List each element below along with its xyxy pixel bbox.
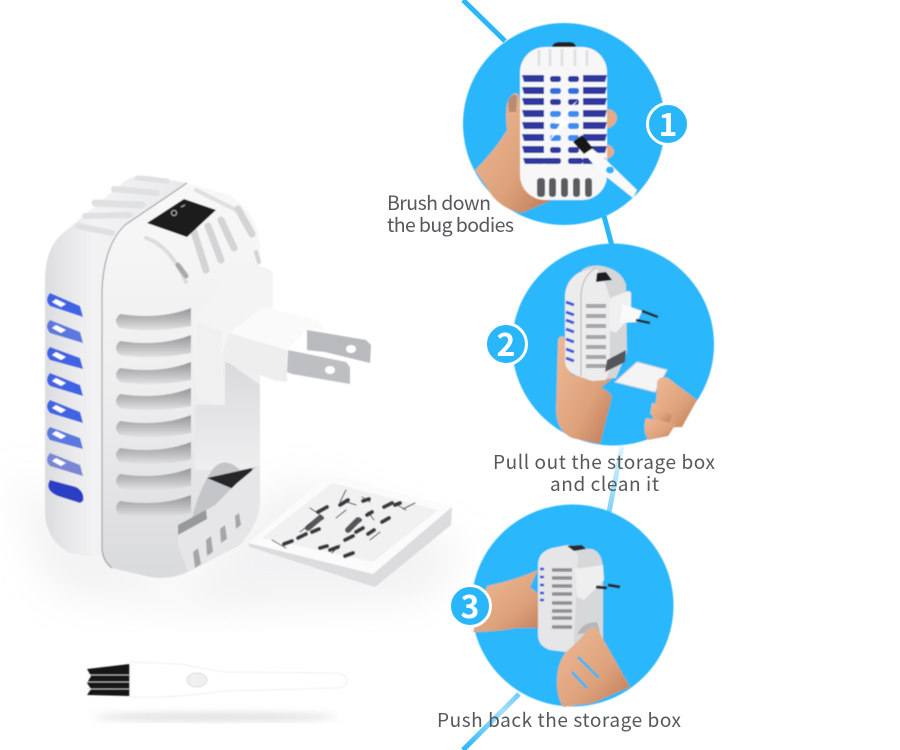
badge 2 [486, 320, 526, 366]
connector line: step 2 to 3 [609, 446, 622, 512]
brush bristles [87, 664, 130, 696]
right shell [102, 183, 260, 578]
step 2 panel [512, 244, 714, 446]
brush hole [187, 673, 207, 687]
blue UV side slots [47, 293, 83, 503]
floor shadow [10, 470, 470, 610]
device rear [566, 547, 603, 653]
plug pins [596, 585, 620, 588]
badge 1: 1 [659, 100, 677, 146]
plug base side [196, 322, 225, 405]
bottom vents [537, 178, 592, 197]
finger gaps [572, 657, 599, 688]
left hand [473, 570, 549, 632]
brush accessory [87, 662, 347, 720]
device body [520, 47, 607, 200]
blue side slots [566, 302, 574, 361]
device front [565, 268, 610, 381]
bottom hand [557, 628, 630, 707]
caption 3: Push back the storage box [437, 706, 682, 733]
top vents [78, 178, 240, 233]
device front [538, 545, 578, 653]
plug body front [220, 333, 287, 382]
front vent slots [116, 308, 191, 517]
blue disc [463, 23, 665, 225]
connector line: top [463, 0, 505, 41]
switch [567, 545, 586, 551]
tray opening [178, 462, 260, 572]
storage tray [248, 475, 452, 587]
step 1 panel [463, 23, 665, 225]
switch [552, 42, 576, 47]
badge 3 [450, 582, 490, 628]
badge 1 [648, 100, 688, 146]
tray hand [644, 377, 697, 440]
brush shadow [93, 714, 337, 720]
tray opening [577, 622, 600, 635]
small tray [615, 362, 667, 392]
hand [475, 93, 552, 213]
side vents near switch [146, 209, 259, 282]
holding hand [556, 336, 613, 444]
housing seam [102, 183, 187, 568]
badge 2: 2 [497, 320, 515, 366]
blue side slots [540, 569, 544, 600]
badge 3: 3 [461, 582, 479, 628]
lightning mark [548, 100, 578, 142]
cleaning brush [573, 135, 637, 198]
power switch [147, 199, 216, 237]
tray opening [605, 350, 626, 372]
slots [552, 570, 572, 627]
caption 1 [387, 187, 514, 238]
dead bugs [272, 490, 415, 556]
caption 2: and clean it [550, 470, 659, 497]
blue disc [472, 504, 674, 706]
plug pins [636, 311, 658, 323]
caption 1: the bug bodies [387, 209, 514, 238]
thumb nail [508, 95, 517, 112]
caption 1: Brush down [387, 187, 491, 216]
fingers right [606, 109, 617, 159]
EU plug body [620, 304, 642, 323]
connector line: bottom [463, 694, 519, 750]
prong rear [307, 330, 371, 363]
EU plug base [609, 291, 631, 333]
caption 2: Pull out the storage box [493, 448, 716, 475]
glowing slots [522, 75, 607, 164]
switch [596, 272, 612, 282]
blue disc [512, 244, 714, 446]
prong front [287, 350, 350, 384]
brush handle [130, 662, 347, 697]
left shell [45, 176, 187, 558]
EU plug [575, 565, 604, 600]
slots [586, 306, 606, 366]
step 3 panel [472, 504, 674, 707]
plug body top [229, 307, 325, 350]
rear lower body [195, 360, 260, 470]
device rear [578, 266, 627, 380]
top ribs [539, 49, 587, 66]
seam [581, 268, 596, 376]
illustration: bug zapper with removed tray [10, 176, 470, 610]
bristle gaps [87, 675, 130, 689]
caption 2 [493, 448, 716, 497]
plug base [194, 267, 273, 405]
connector line: step 1 to 2 [604, 216, 612, 246]
